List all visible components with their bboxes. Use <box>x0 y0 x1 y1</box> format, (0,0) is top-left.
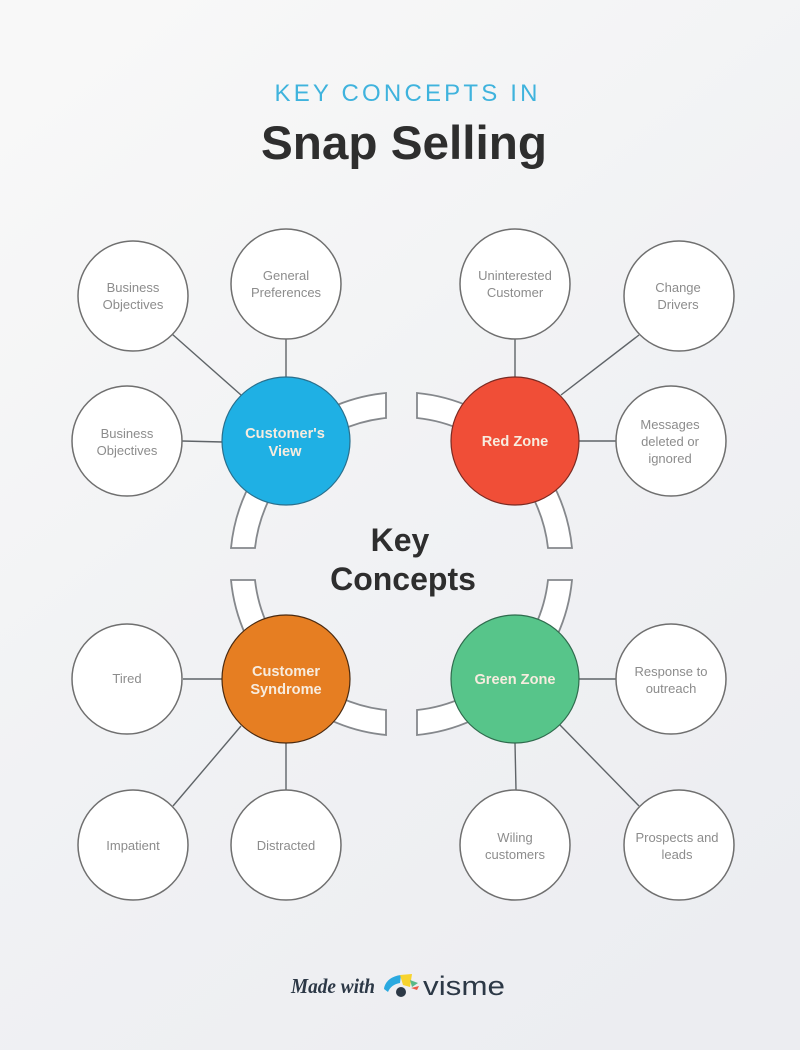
node: Response to outreach <box>616 624 726 734</box>
node: Impatient <box>78 790 188 900</box>
node: Wiling customers: Wiling <box>497 830 533 845</box>
node: Prospects and leads: leads <box>661 847 693 862</box>
hub: Customer Syndrome <box>222 615 350 743</box>
node: Business Objectives (upper): Business <box>107 280 160 295</box>
node: Messages deleted or ignored: deleted or <box>641 434 700 449</box>
connectors: customer's view <box>172 334 286 442</box>
node: Messages deleted or ignored <box>616 386 726 496</box>
node: Wiling customers: customers <box>485 847 545 862</box>
hub: Green Zone: Green Zone <box>474 672 556 688</box>
title: main heading: Snap Selling <box>261 116 547 169</box>
node: Business Objectives (upper) <box>78 241 188 351</box>
node: Change Drivers <box>624 241 734 351</box>
node: General Preferences <box>231 229 341 339</box>
hub: Customer's View: Customer's <box>245 426 325 442</box>
title: eyebrow: KEY CONCEPTS IN <box>274 80 538 107</box>
node: Distracted: Distracted <box>257 838 315 853</box>
center heading <box>330 522 476 597</box>
hub: Red Zone: Red Zone <box>482 434 548 450</box>
node: General Preferences: General <box>263 268 309 283</box>
center heading: Concepts <box>330 561 476 597</box>
icon: visme logo <box>384 974 419 997</box>
node: Business Objectives (lower) <box>72 386 182 496</box>
hub: Customer Syndrome: Syndrome <box>250 682 322 698</box>
connectors: customer syndrome <box>173 679 286 806</box>
node: Tired: Tired <box>112 671 142 686</box>
node: Uninterested Customer <box>460 229 570 339</box>
arc: upper right <box>417 393 572 548</box>
hub: Customer's View: View <box>268 444 302 460</box>
footer script text: Made with <box>290 974 375 998</box>
wordmark: visme <box>423 971 505 1001</box>
node: Response to outreach: Response to <box>634 664 708 679</box>
hub: Green Zone <box>451 615 579 743</box>
hub: Red Zone <box>451 377 579 505</box>
arc: lower right <box>417 580 572 735</box>
connectors: green zone <box>515 679 639 806</box>
node: Response to outreach: outreach <box>646 681 696 696</box>
node: Distracted <box>231 790 341 900</box>
connectors: red zone <box>515 335 639 441</box>
footer: made with visme <box>290 971 505 1001</box>
arc: lower left <box>231 580 386 735</box>
node: Uninterested Customer: Uninterested <box>478 268 552 283</box>
node: Uninterested Customer: Customer <box>487 285 544 300</box>
node: Business Objectives (lower): Objectives <box>97 443 158 458</box>
hub: Customer Syndrome: Customer <box>252 664 320 680</box>
hub: Customer's View <box>222 377 350 505</box>
node: Impatient: Impatient <box>106 838 160 853</box>
node: Change Drivers: Drivers <box>657 297 699 312</box>
node: Wiling customers <box>460 790 570 900</box>
node: Business Objectives (upper): Objectives <box>103 297 164 312</box>
node: Prospects and leads <box>624 790 734 900</box>
node: Messages deleted or ignored: ignored <box>648 451 692 466</box>
node: Change Drivers: Change <box>655 280 701 295</box>
node: Tired <box>72 624 182 734</box>
arc: upper left <box>231 393 386 548</box>
center heading: Key <box>371 522 430 558</box>
node: General Preferences: Preferences <box>251 285 322 300</box>
node: Business Objectives (lower): Business <box>101 426 154 441</box>
node: Prospects and leads: Prospects and <box>635 830 719 845</box>
node: Messages deleted or ignored: Messages <box>640 417 700 432</box>
